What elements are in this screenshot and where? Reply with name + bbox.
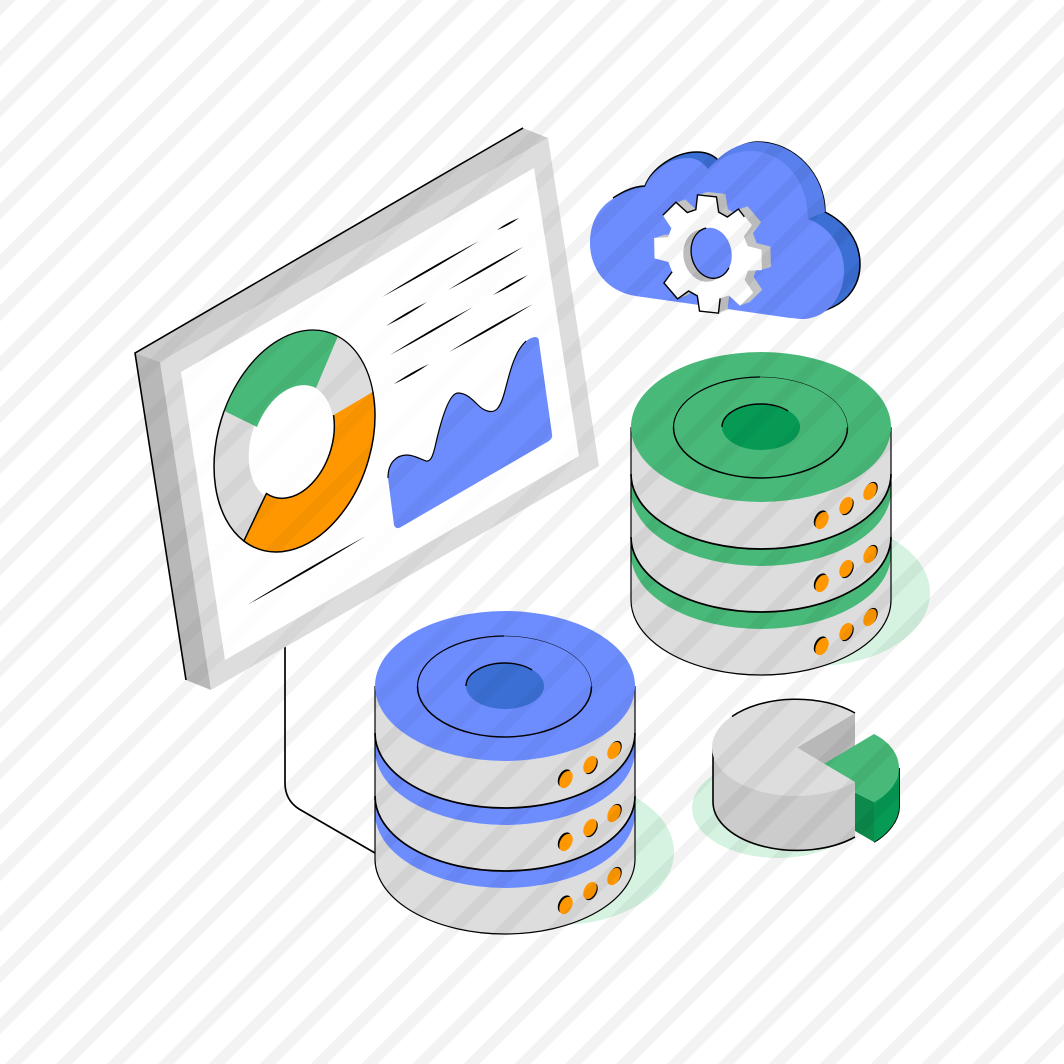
- top hole: [722, 404, 800, 450]
- cloud back extrusion: [613, 142, 860, 319]
- top ring upper left: [674, 377, 760, 428]
- gear front face: [653, 190, 763, 318]
- green slice outer wall: [874, 768, 899, 842]
- green slice top: [812, 734, 899, 802]
- bottom disk: [631, 554, 891, 675]
- cloud with gear: [590, 142, 860, 319]
- middle disk: [631, 491, 891, 612]
- blue top face: [375, 611, 635, 761]
- pie cut inner wall: [797, 713, 855, 772]
- top ring thick: [418, 686, 592, 737]
- pie chart shadow: [692, 758, 864, 858]
- groove lower: [631, 537, 891, 612]
- top disk side: [631, 427, 891, 549]
- indicator dots: [811, 480, 880, 657]
- 3D pie chart: [712, 699, 899, 850]
- donut grey track: [200, 294, 389, 588]
- top disk side: [375, 686, 635, 808]
- pie top face: [712, 699, 855, 796]
- monitor outer outline: [135, 128, 523, 680]
- gear hole: [687, 224, 736, 282]
- groove lower: [375, 796, 635, 871]
- indicator dots: [555, 739, 624, 916]
- top ring thin: [418, 636, 592, 737]
- middle disk: [375, 750, 635, 871]
- donut green outline: [219, 308, 339, 411]
- monitor frame left side: [135, 353, 211, 690]
- donut track outline right: [338, 322, 373, 406]
- monitor frame top side: [135, 128, 548, 362]
- green slice left wall: [850, 790, 874, 842]
- top ring thick: [674, 428, 848, 478]
- gear outline top: [662, 191, 744, 224]
- monitor dashboard: [135, 128, 599, 690]
- top hole outline: [466, 663, 532, 686]
- pie outer side: [713, 748, 855, 850]
- area chart: [388, 337, 552, 528]
- stack outline: [631, 427, 891, 675]
- gear icon: [653, 187, 772, 318]
- connector line from monitor to blue database: [285, 646, 375, 853]
- gear hole edge: [686, 225, 730, 282]
- donut orange segment: [233, 392, 389, 577]
- gear hole depth: [678, 225, 732, 286]
- stack outline: [375, 686, 635, 934]
- blue database stack: [375, 611, 635, 934]
- groove upper: [631, 474, 891, 549]
- lower blue band: [375, 796, 635, 888]
- cloud big lobe side: [708, 142, 825, 219]
- area chart fill: [388, 337, 552, 528]
- gear outline bottom: [664, 271, 720, 313]
- cloud front face: [590, 151, 844, 319]
- top hole: [466, 663, 544, 709]
- donut track outline left: [206, 411, 244, 552]
- green database stack: [631, 352, 891, 675]
- bottom disk: [375, 813, 635, 934]
- top ring thin: [674, 377, 848, 478]
- blue database shadow: [444, 779, 674, 925]
- donut chart: [200, 294, 389, 588]
- area chart outline: [388, 341, 526, 478]
- donut green segment: [219, 308, 344, 443]
- pie bottom outline: [713, 748, 855, 850]
- green database shadow: [700, 520, 930, 666]
- top ring upper left: [418, 636, 504, 686]
- monitor screen: [181, 168, 579, 660]
- upper green band: [631, 474, 891, 566]
- groove upper: [375, 733, 635, 808]
- green top face: [631, 352, 891, 502]
- top hole outline: [722, 404, 788, 427]
- gear extrusion: [656, 187, 772, 317]
- green slice outline: [874, 768, 899, 842]
- cloud back outline: [613, 142, 860, 315]
- pie top outline: [732, 699, 855, 716]
- text placeholder lines: [247, 218, 533, 605]
- lower green band: [631, 537, 891, 629]
- upper blue band: [375, 733, 635, 825]
- monitor frame front: [160, 138, 599, 690]
